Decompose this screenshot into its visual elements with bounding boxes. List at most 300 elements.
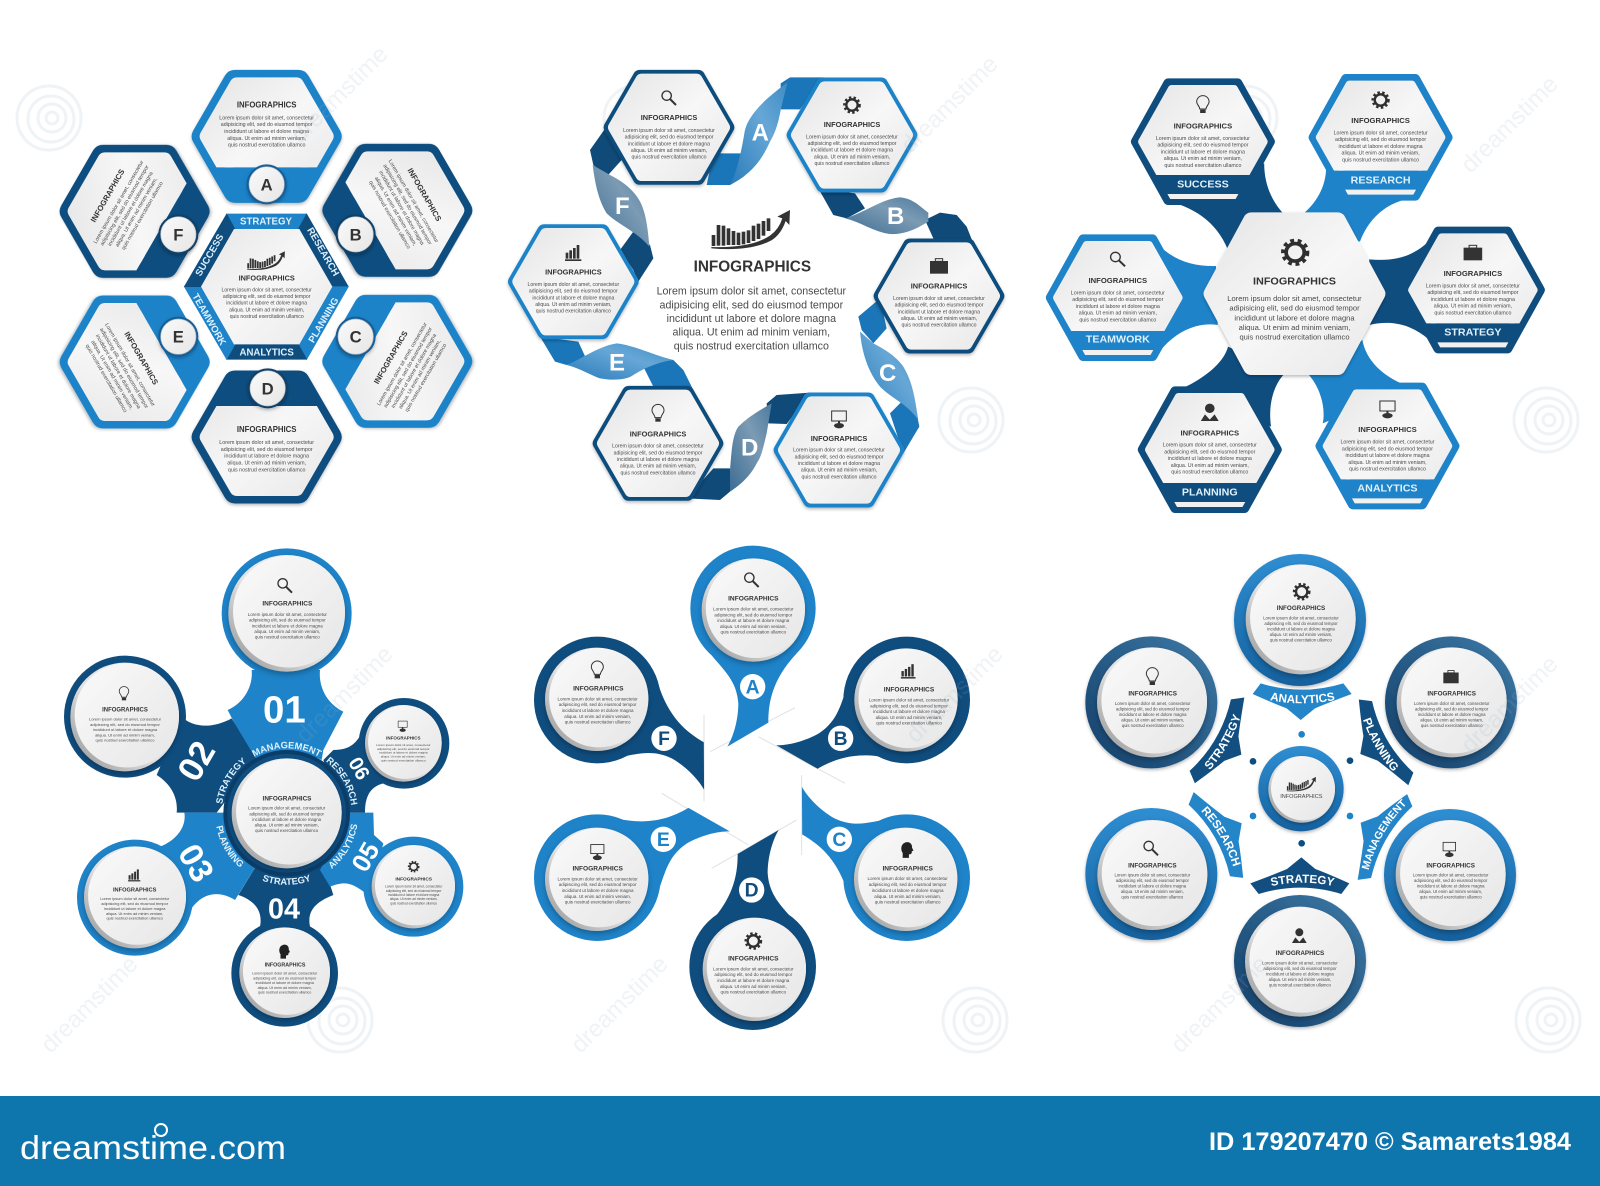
card: bulb: INFOGRAPHICS [630,430,686,439]
disc 01: Lorem ipsum dolor sit amet, consectetur [248,612,327,617]
disc 06: INFOGRAPHICS [386,735,421,740]
connector dots [1250,731,1353,847]
card: gear: Lorem ipsum dolor sit amet, consectetur [806,134,898,140]
hub ring [223,750,350,877]
card SUCCESS [1136,83,1270,200]
disc 05: INFOGRAPHICS [395,877,432,883]
diagonal watermark text: dreamstime [566,951,674,1059]
card: gear: quis nostrud exercitation ullamco [814,161,890,167]
card TEAMWORK: Lorem ipsum dolor sit amet, consectetur [1071,290,1165,296]
card C: Lorem ipsum dolor sit amet, consectetur [376,322,429,407]
disc centre [232,758,342,868]
drop B: quis nostrud exercitation ullamco [876,721,942,726]
circle top-right: incididunt ut labore et dolore magna [1418,712,1486,717]
drop B [768,637,970,805]
badge D: D [745,881,759,902]
card: bars: INFOGRAPHICS [545,268,602,277]
numbers [170,689,386,926]
centre text block: incididunt ut labore et dolore magna [667,313,836,325]
badge E [158,317,198,357]
drop A: INFOGRAPHICS [728,596,779,603]
drop C: incididunt ut labore et dolore magna [872,888,944,893]
card STRATEGY: STRATEGY [1444,326,1502,338]
drop E: adipisicing elit, sed do eiusmod tempor [559,882,637,887]
card: gear: adipisicing elit, sed do eiusmod tempor [808,141,897,147]
drop B: adipisicing elit, sed do eiusmod tempor [870,703,948,708]
card D: INFOGRAPHICS [237,425,297,434]
card STRATEGY: Lorem ipsum dolor sit amet, consectetur [1426,283,1520,289]
drop D: incididunt ut labore et dolore magna [717,978,790,983]
badge A: A [746,677,760,698]
drop E: INFOGRAPHICS [572,866,623,873]
disc 01: adipisicing elit, sed do eiusmod tempor [249,618,326,623]
card F: aliqua. Ut enim ad minim veniam, [115,177,159,248]
card PLANNING: adipisicing elit, sed do eiusmod tempor [1164,449,1256,455]
card SUCCESS: quis nostrud exercitation ullamco [1164,163,1241,169]
drop F: aliqua. Ut enim ad minim veniam, [564,714,631,719]
disc 03: INFOGRAPHICS [113,887,157,893]
banner PLANNING: PLANNING [1363,718,1398,771]
ring labels: STRATEGY [216,757,245,804]
disc centre: Lorem ipsum dolor sit amet, consectetur [248,806,326,811]
ring labels: PLANNING [216,826,244,867]
card: briefcase: quis nostrud exercitation ullamco [901,323,977,329]
ribbon E [540,337,693,390]
card: bars: aliqua. Ut enim ad minim veniam, [535,302,611,308]
diagonal watermark text: dreamstime [291,641,399,749]
card ANALYTICS [1321,388,1454,504]
disc 06: incididunt ut labore et dolore magna [379,751,428,755]
drop A: adipisicing elit, sed do eiusmod tempor [714,612,793,617]
badge F: F [658,729,670,750]
ribbon D [687,393,810,500]
card: bulb: incididunt ut labore et dolore magna [617,457,699,463]
card ANALYTICS: INFOGRAPHICS [1358,425,1417,434]
disc 02: adipisicing elit, sed do eiusmod tempor [90,722,161,727]
drop D: quis nostrud exercitation ullamco [720,990,787,995]
card: magnifier: quis nostrud exercitation ullamco [631,155,707,161]
ribbon A [707,77,823,185]
card PLANNING: PLANNING [1182,487,1238,499]
card B: INFOGRAPHICS [406,167,443,223]
badge C [336,317,376,357]
card: monitor: adipisicing elit, sed do eiusmod tempor [795,454,884,460]
card: briefcase: adipisicing elit, sed do eiusmod tempor [895,303,984,309]
card: bulb [599,393,717,494]
card: bulb: adipisicing elit, sed do eiusmod tempor [614,450,703,456]
numbers: 06 [343,754,374,784]
circle bottom [1234,895,1366,1027]
card STRATEGY [1406,232,1540,348]
badge C [827,827,852,852]
centre hexagon: quis nostrud exercitation ullamco [1239,333,1350,342]
circle top-right: INFOGRAPHICS [1427,691,1476,698]
card: monitor: INFOGRAPHICS [811,434,867,443]
circle bottom: quis nostrud exercitation ullamco [1269,983,1332,988]
diagonal watermark text: dreamstime [1456,651,1564,759]
card SUCCESS: INFOGRAPHICS [1174,122,1232,131]
drop D [689,830,816,1030]
card: gear: aliqua. Ut enim ad minim veniam, [814,154,890,160]
card D: Lorem ipsum dolor sit amet, consectetur [219,440,314,446]
drop A [690,546,816,747]
banner RESEARCH [1188,792,1244,878]
card: briefcase: Lorem ipsum dolor sit amet, consectetur [893,296,985,302]
badge E [651,827,676,852]
card RESEARCH: adipisicing elit, sed do eiusmod tempor [1335,137,1426,143]
central hexagon with labelled segments: RESEARCH [304,226,341,278]
ring labels: ANALYTICS [329,824,358,869]
sector 04 [231,863,338,1027]
circle bottom-right: aliqua. Ut enim ad minim veniam, [1419,889,1482,894]
card: bulb: quis nostrud exercitation ullamco [620,470,696,476]
card TEAMWORK [1051,239,1185,356]
panel: ribbon hexagon ring [515,77,998,501]
disc 04: quis nostrud exercitation ullamco [258,991,311,995]
sector 02 [64,656,257,813]
centre hexagon: INFOGRAPHICS [1253,276,1336,288]
drop A: incididunt ut labore et dolore magna [717,618,790,623]
drop F [534,637,739,805]
central hexagon with labelled segments: aliqua. Ut enim ad minim veniam, [229,307,304,313]
banner ANALYTICS: ANALYTICS [1270,692,1334,704]
drop C: adipisicing elit, sed do eiusmod tempor [869,882,947,887]
card ANALYTICS: aliqua. Ut enim ad minim veniam, [1348,460,1427,466]
card B [318,128,476,293]
circle bottom: incididunt ut labore et dolore magna [1266,972,1334,977]
disc 01: aliqua. Ut enim ad minim veniam, [254,629,320,634]
card E: Lorem ipsum dolor sit amet, consectetur [103,322,156,408]
card A: INFOGRAPHICS [237,101,297,110]
ring labels [216,742,358,885]
circle top-right: adipisicing elit, sed do eiusmod tempor [1415,706,1489,711]
banner STRATEGY upper-left [1190,698,1244,784]
circle bottom-left [1085,808,1217,940]
circle bottom: aliqua. Ut enim ad minim veniam, [1269,977,1331,982]
circle top: Lorem ipsum dolor sit amet, consectetur [1263,616,1339,621]
badge B: B [834,729,848,750]
disc centre: incididunt ut labore et dolore magna [252,817,322,822]
card PLANNING: INFOGRAPHICS [1180,428,1239,437]
disc 06: adipisicing elit, sed do eiusmod tempor [377,747,430,751]
badge B [828,726,853,751]
circle top-left: INFOGRAPHICS [1128,691,1177,698]
circle bottom: INFOGRAPHICS [1276,950,1324,957]
disc 06: aliqua. Ut enim ad minim veniam, [381,755,426,759]
card: magnifier: INFOGRAPHICS [641,113,697,122]
numbers: 05 [345,837,386,877]
circle top: quis nostrud exercitation ullamco [1270,638,1333,643]
connectors [1154,163,1433,427]
card TEAMWORK: TEAMWORK [1086,334,1150,346]
drop C [767,772,970,941]
card B: Lorem ipsum dolor sit amet, consectetur [387,159,439,244]
drop C: INFOGRAPHICS [882,865,933,872]
badge F: F [173,225,183,244]
card RESEARCH: aliqua. Ut enim ad minim veniam, [1342,151,1420,156]
ribbon E: E [609,350,625,377]
disc 04: INFOGRAPHICS [265,963,306,969]
diagonal watermark text: dreamstime [896,51,1004,159]
centre hexagon: adipisicing elit, sed do eiusmod tempor [1229,304,1360,313]
disc 02: incididunt ut labore et dolore magna [93,727,158,732]
ribbon A: A [752,120,769,147]
card STRATEGY: INFOGRAPHICS [1444,269,1502,278]
circle bottom: adipisicing elit, sed do eiusmod tempor [1263,966,1337,971]
circle top-left: quis nostrud exercitation ullamco [1122,723,1184,728]
card: magnifier: incididunt ut labore et dolore magna [628,141,710,147]
card PLANNING: quis nostrud exercitation ullamco [1171,470,1248,476]
diagonal watermark text: dreamstime [901,641,1009,749]
ribbon D: D [741,434,758,461]
badge B [336,214,376,254]
card: magnifier: aliqua. Ut enim ad minim veniam, [631,148,707,154]
card TEAMWORK: quis nostrud exercitation ullamco [1079,317,1156,323]
drop E [534,771,738,941]
drop A: quis nostrud exercitation ullamco [720,630,787,635]
drop D: Lorem ipsum dolor sit amet, consectetur [713,966,794,971]
diagonal watermark text: dreamstime [1456,71,1564,179]
circle top-right: aliqua. Ut enim ad minim veniam, [1420,717,1483,722]
drop A: Lorem ipsum dolor sit amet, consectetur [713,607,794,612]
circle bottom-right [1384,809,1516,941]
disc 03: adipisicing elit, sed do eiusmod tempor [101,901,169,906]
card D: quis nostrud exercitation ullamco [228,467,305,473]
card B: adipisicing elit, sed do eiusmod tempor [381,163,433,246]
drop E: Lorem ipsum dolor sit amet, consectetur [558,876,638,881]
circle top-left: incididunt ut labore et dolore magna [1119,712,1187,717]
card STRATEGY: quis nostrud exercitation ullamco [1434,310,1511,316]
card: briefcase: INFOGRAPHICS [911,282,967,291]
card PLANNING: Lorem ipsum dolor sit amet, consectetur [1163,443,1257,449]
drop F: adipisicing elit, sed do eiusmod tempor [559,702,637,707]
badge E: E [657,830,670,851]
badge C: C [350,328,362,347]
numbers: 02 [170,735,223,788]
panel: hexagon cluster A-F [56,81,476,492]
centre text block: Lorem ipsum dolor sit amet, consectetur [657,286,847,298]
ribbon B [818,188,973,243]
circle top-left [1085,636,1217,768]
card: bars: quis nostrud exercitation ullamco [536,309,611,315]
card ANALYTICS: adipisicing elit, sed do eiusmod tempor [1342,446,1433,452]
card D: incididunt ut labore et dolore magna [224,454,309,460]
card: bars [515,231,632,332]
card: monitor: aliqua. Ut enim ad minim veniam, [801,468,877,474]
circle top: incididunt ut labore et dolore magna [1267,627,1335,632]
card B: incididunt ut labore et dolore magna [377,170,425,246]
badge F [158,214,198,254]
card ANALYTICS: ANALYTICS [1357,483,1418,495]
card F: adipisicing elit, sed do eiusmod tempor [99,164,151,247]
card F [56,129,214,294]
central hexagon with labelled segments: adipisicing elit, sed do eiusmod tempor [223,294,311,300]
card C: aliqua. Ut enim ad minim veniam, [398,339,443,410]
drop B: Lorem ipsum dolor sit amet, consectetur [869,698,950,703]
sector 01 [222,548,352,760]
centre hexagon: Lorem ipsum dolor sit amet, consectetur [1227,294,1362,303]
diagonal watermark text: dreamstime [1166,951,1274,1059]
card RESEARCH: quis nostrud exercitation ullamco [1342,157,1419,163]
card STRATEGY: incididunt ut labore et dolore magna [1431,297,1515,303]
sector 05 [320,813,463,937]
drop C: aliqua. Ut enim ad minim veniam, [874,894,941,899]
central hexagon with labelled segments [184,214,348,359]
card: monitor: incididunt ut labore et dolore magna [798,461,880,467]
card RESEARCH: Lorem ipsum dolor sit amet, consectetur [1334,130,1428,136]
centre text block: adipisicing elit, sed do eiusmod tempor [660,299,844,311]
badge B: B [350,225,362,244]
card SUCCESS: aliqua. Ut enim ad minim veniam, [1164,156,1242,162]
card TEAMWORK: INFOGRAPHICS [1089,276,1147,285]
card F: incididunt ut labore et dolore magna [107,171,155,247]
circle top-left: adipisicing elit, sed do eiusmod tempor [1116,706,1190,711]
card RESEARCH: incididunt ut labore et dolore magna [1339,144,1423,150]
card E: aliqua. Ut enim ad minim veniam, [89,340,134,411]
disc centre: quis nostrud exercitation ullamco [255,828,319,833]
drop A: aliqua. Ut enim ad minim veniam, [720,624,787,629]
card E [56,280,214,444]
disc 05: incididunt ut labore et dolore magna [388,893,439,897]
card PLANNING: incididunt ut labore et dolore magna [1168,456,1252,462]
card: gear [793,84,911,186]
diagonal watermark text: dreamstime [36,951,144,1059]
centre text block: aliqua. Ut enim ad minim veniam, [673,327,830,339]
card: magnifier: adipisicing elit, sed do eiusmod tempor [625,135,714,141]
drop C: Lorem ipsum dolor sit amet, consectetur [868,876,948,881]
watermark spirals [17,86,1580,1052]
card: monitor: Lorem ipsum dolor sit amet, consectetur [793,448,885,454]
numbers: 04 [268,894,300,926]
card TEAMWORK: adipisicing elit, sed do eiusmod tempor [1072,297,1164,303]
card B: aliqua. Ut enim ad minim veniam, [373,176,417,247]
icon: growth chart [711,210,790,249]
circle bottom-right: incididunt ut labore et dolore magna [1417,883,1485,888]
disc centre: adipisicing elit, sed do eiusmod tempor [249,811,325,816]
icon: gear [1283,240,1307,264]
card ANALYTICS: quis nostrud exercitation ullamco [1349,467,1426,473]
card TEAMWORK: aliqua. Ut enim ad minim veniam, [1079,311,1157,316]
disc centre: INFOGRAPHICS [263,796,311,803]
centre text block: INFOGRAPHICS [694,259,811,276]
card: briefcase: incididunt ut labore et dolore magna [898,309,980,315]
banner STRATEGY bottom: STRATEGY [1270,874,1335,886]
card STRATEGY: adipisicing elit, sed do eiusmod tempor [1427,290,1519,296]
card C: adipisicing elit, sed do eiusmod tempor [383,326,434,409]
central hexagon with labelled segments: SUCCESS [194,232,227,278]
card: bars: adipisicing elit, sed do eiusmod tempor [529,289,618,295]
circle bottom-right: Lorem ipsum dolor sit amet, consectetur [1413,873,1489,878]
card: monitor: quis nostrud exercitation ullamco [801,474,877,480]
disc 04: Lorem ipsum dolor sit amet, consectetur [252,972,318,976]
disc 03: incididunt ut labore et dolore magna [104,906,166,911]
numbers: 01 [263,689,306,732]
disc centre: aliqua. Ut enim ad minim veniam, [255,822,319,827]
disc 01: INFOGRAPHICS [262,601,313,608]
drop E: quis nostrud exercitation ullamco [565,900,631,905]
card SUCCESS: SUCCESS [1177,179,1229,191]
circle top-right: quis nostrud exercitation ullamco [1421,723,1483,728]
circle bottom-left: INFOGRAPHICS [1128,862,1177,869]
card B: quis nostrud exercitation ullamco [367,180,411,250]
card: bars: incididunt ut labore et dolore magna [532,295,614,301]
card: monitor [780,399,898,501]
card E: incididunt ut labore et dolore magna [94,334,141,410]
centre circle [1258,746,1344,831]
card: bulb: aliqua. Ut enim ad minim veniam, [620,464,696,470]
ring labels: MANAGEMENT [252,742,322,757]
banner STRATEGY bottom [1250,857,1350,894]
card C [318,279,476,444]
card: gear: incididunt ut labore et dolore magna [811,148,893,154]
panel: ring of circles with banners [1084,554,1519,1030]
drop F: Lorem ipsum dolor sit amet, consectetur [558,696,638,701]
card RESEARCH: RESEARCH [1351,174,1411,186]
logo: dreamstime.com [20,1129,286,1166]
banner STRATEGY upper-left: STRATEGY [1204,714,1240,769]
circle bottom-right: quis nostrud exercitation ullamco [1420,894,1482,899]
disc 01: quis nostrud exercitation ullamco [255,635,320,640]
badge C: C [832,830,846,851]
card D [203,368,330,492]
disc 04: adipisicing elit, sed do eiusmod tempor [253,976,317,980]
badge D [739,877,764,903]
card F: INFOGRAPHICS [89,168,126,224]
card: magnifier [610,77,728,178]
card SUCCESS: incididunt ut labore et dolore magna [1161,150,1245,155]
panel: teardrop circles A-F [534,546,970,1030]
central hexagon with labelled segments: incididunt ut labore et dolore magna [226,301,307,307]
circle top: INFOGRAPHICS [1277,605,1325,612]
hexagon gap shadows [662,708,845,868]
card: gear: INFOGRAPHICS [824,120,880,129]
centre text block: quis nostrud exercitation ullamco [674,340,829,352]
disc 06: quis nostrud exercitation ullamco [381,758,426,762]
centre circle: INFOGRAPHICS [1280,794,1323,800]
card RESEARCH [1314,79,1447,196]
circle bottom-left: adipisicing elit, sed do eiusmod tempor [1116,878,1190,883]
circle top [1234,554,1366,686]
card A: incididunt ut labore et dolore magna [224,129,309,135]
ring labels: STRATEGY [262,874,310,885]
card A: quis nostrud exercitation ullamco [228,143,305,149]
disc 05 [372,845,455,928]
central hexagon with labelled segments: INFOGRAPHICS [239,273,295,282]
disc 05: Lorem ipsum dolor sit amet, consectetur [385,885,443,889]
circle top-right [1385,636,1517,768]
panel: circular hub 01-06 [64,548,464,1027]
banner MANAGEMENT: MANAGEMENT [1362,798,1406,870]
badge A [740,674,765,699]
centre hexagon [1212,220,1377,367]
card: bulb: Lorem ipsum dolor sit amet, consectetur [612,444,704,450]
badge F [651,726,677,751]
banner RESEARCH: RESEARCH [1201,806,1241,866]
drop D: INFOGRAPHICS [728,955,779,962]
circle bottom-left: aliqua. Ut enim ad minim veniam, [1121,889,1184,894]
circle bottom-left: quis nostrud exercitation ullamco [1121,894,1184,899]
card: briefcase: aliqua. Ut enim ad minim veniam, [901,316,977,322]
card A: aliqua. Ut enim ad minim veniam, [227,136,306,142]
panel: hexagon hub with labelled petals [1051,79,1540,508]
disc 03: Lorem ipsum dolor sit amet, consectetur [100,896,170,901]
card C: incididunt ut labore et dolore magna [391,333,438,409]
drop D: adipisicing elit, sed do eiusmod tempor [714,972,793,977]
drop C: quis nostrud exercitation ullamco [875,900,941,905]
drop B: aliqua. Ut enim ad minim veniam, [876,715,942,720]
card F: Lorem ipsum dolor sit amet, consectetur [93,160,145,245]
disc 03 [84,846,186,948]
